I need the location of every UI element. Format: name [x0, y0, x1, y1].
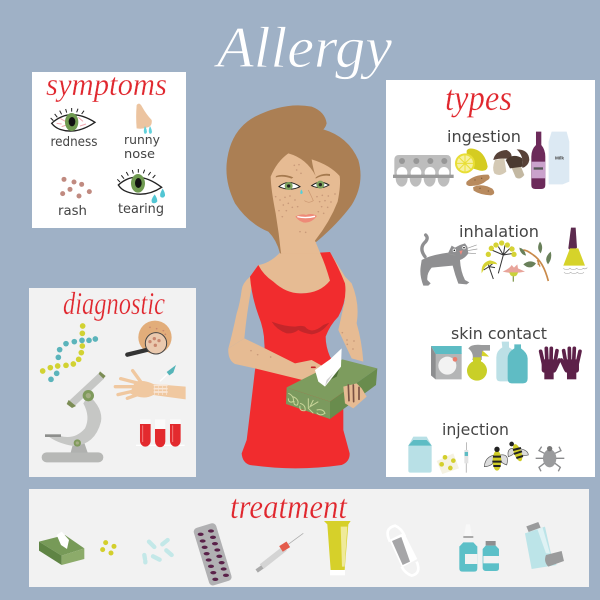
title: Allergy — [213, 15, 392, 80]
icon: face mask — [388, 526, 418, 576]
panel: diagnostic — [29, 285, 196, 477]
panel: types — [386, 78, 595, 477]
icon: blood test tubes — [136, 419, 185, 447]
icon: bees — [484, 442, 528, 471]
woman: body and upper arms — [228, 241, 363, 468]
icon: arm with skin test — [115, 365, 186, 399]
heading: treatment: treatment — [230, 489, 348, 526]
icon: wine bottle — [531, 132, 545, 189]
woman: face — [271, 153, 340, 253]
icon: red eye — [51, 108, 95, 131]
icon: tissue box held — [286, 348, 377, 419]
icon: nasal spray bottles — [459, 524, 499, 572]
heading: types: types — [445, 78, 512, 118]
label: injection: injection — [442, 420, 509, 439]
label: inhalation: inhalation — [459, 222, 539, 241]
label: skin contact: skin contact — [451, 324, 547, 343]
panel: symptoms — [32, 66, 186, 228]
label: rash: rash — [58, 204, 87, 219]
icon: runny nose — [136, 104, 152, 134]
label: runny nose: runny — [124, 132, 161, 147]
icon: tissue box — [39, 532, 84, 565]
icon: dna strand — [40, 323, 98, 382]
icon: mushrooms — [493, 149, 529, 179]
label: ingestion: ingestion — [447, 127, 521, 146]
icon: pollen pills — [437, 453, 459, 474]
icon: tick — [536, 446, 564, 471]
icon: rubber gloves — [541, 348, 580, 379]
icon: syringe — [464, 442, 468, 473]
icon: spray bottle — [467, 345, 490, 381]
icon: inhaler — [525, 522, 564, 569]
label: redness: redness — [50, 135, 98, 150]
icon: egg carton — [393, 155, 454, 187]
figure: woman with allergy — [226, 105, 377, 468]
icon: syringe with red cap — [257, 533, 303, 571]
icon: microscope — [42, 371, 106, 462]
icon: washing machine — [431, 346, 462, 379]
woman: forearm and rash — [228, 332, 355, 384]
icon: dust brush — [563, 228, 587, 274]
icon: detergent bottles — [496, 342, 528, 383]
icon: allergy plants — [482, 240, 551, 282]
icon: blister pack — [193, 522, 233, 586]
woman: hair — [226, 105, 361, 253]
panel: treatment — [29, 489, 589, 587]
icon: medicine vial — [408, 437, 432, 473]
icon: tearing eye — [117, 169, 165, 203]
heading: diagnostic: diagnostic — [63, 285, 165, 321]
icon: capsules — [144, 540, 172, 562]
icon: ointment tube — [324, 521, 351, 575]
icon: milk carton — [549, 132, 569, 184]
label: runny nose: nose — [124, 146, 155, 161]
icon: milk carton: Milk — [555, 155, 564, 160]
icon: cat — [420, 235, 477, 286]
label: tearing: tearing — [118, 202, 164, 217]
icon: yellow pills — [100, 540, 116, 555]
icon: lemon and nuts — [455, 148, 494, 195]
heading: symptoms: symptoms — [46, 66, 167, 102]
icon: rash dots — [60, 177, 92, 198]
icon: magnifier over skin — [127, 321, 172, 355]
